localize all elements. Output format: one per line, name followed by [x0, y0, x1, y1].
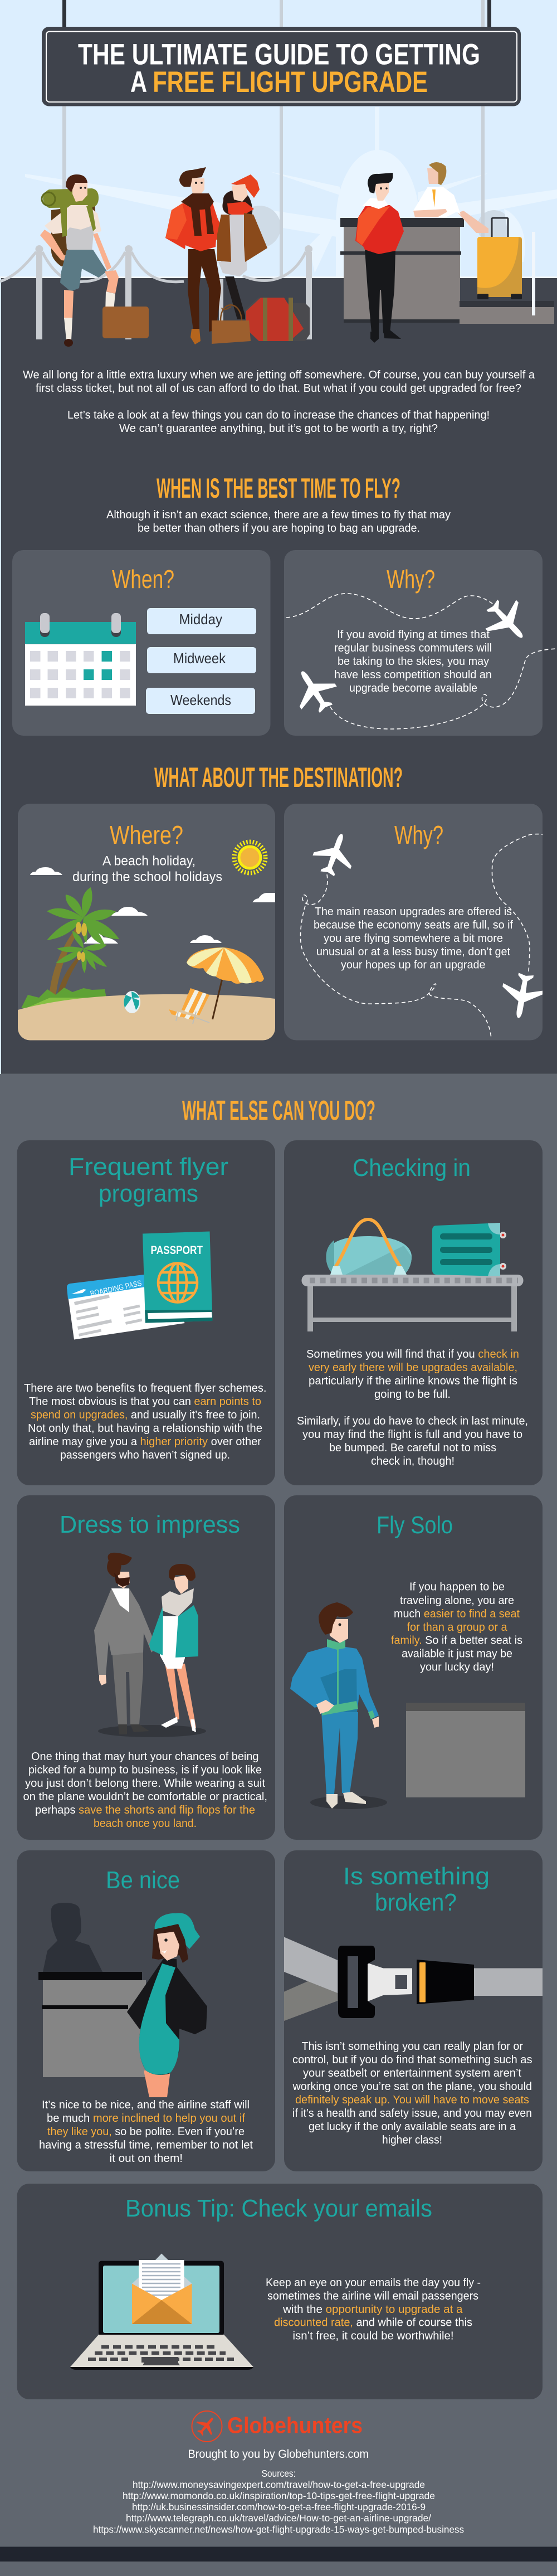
panel: checking in: [284, 1140, 543, 1485]
panel heading: Is something: [343, 1863, 490, 1890]
panel text: This isn’t something you can really plan for or: [302, 2040, 523, 2053]
why text: The main reason upgrades are offered is: [315, 906, 512, 918]
subheading text: [106, 509, 451, 534]
panel heading: Bonus Tip: Check your emails: [125, 2195, 432, 2222]
intro text: We can’t guarantee anything, but it’s got to be worth a try, right?: [119, 422, 438, 435]
option: midday: [147, 608, 256, 634]
panel text: perhaps save the shorts and flip flops for the: [35, 1804, 255, 1816]
panel text: if it’s a health and safety issue, and you may even: [292, 2107, 532, 2120]
panel text: they like you, so be polite. Even if you’re: [47, 2126, 245, 2138]
panel heading: broken?: [375, 1889, 457, 1916]
why text: have less competition should an: [334, 669, 492, 681]
panel text: It’s nice to be nice, and the airline staff will: [42, 2099, 250, 2111]
panel: bonus tip: [17, 2184, 543, 2399]
panel text: [23, 1751, 267, 1830]
why text: regular business commuters will: [334, 642, 492, 654]
dashed flight paths: [300, 834, 556, 1039]
illustration: desk: [406, 1703, 525, 1797]
why text: [334, 629, 492, 694]
sources: http://www.moneysavingexpert.com/travel/how-to-get-a-free-upgrade: [133, 2479, 425, 2490]
panel text: [39, 2099, 253, 2165]
bag: [326, 1236, 412, 1275]
panel text: you just don’t belong there. While wearing a suit: [25, 1777, 265, 1790]
palm trees: [47, 887, 119, 997]
option: midday: Midday: [179, 611, 222, 628]
icon: passport: PASSPORT: [150, 1244, 203, 1257]
icon: plane bottom: [502, 973, 543, 1018]
beach scene: [18, 842, 275, 1041]
panel text: check in, though!: [371, 1455, 455, 1467]
panel text: [391, 1581, 522, 1674]
beach umbrella: [187, 947, 264, 1019]
title text: A FREE FLIGHT UPGRADE: [130, 66, 428, 99]
illustration: luggage: [212, 298, 310, 344]
icon: boarding pass: BOARDING PASS: [89, 1279, 143, 1298]
panel: is something broken: [284, 1850, 543, 2171]
icon: plane bottom left: [284, 660, 344, 720]
panel heading: where: Where?: [110, 820, 183, 849]
where text: during the school holidays: [72, 869, 222, 884]
panel: be nice: [17, 1850, 275, 2171]
why text: If you avoid flying at times that: [337, 629, 490, 641]
panel text: family. So if a better seat is: [391, 1634, 522, 1646]
panel text: your seatbelt or entertainment system aren’t: [303, 2067, 521, 2079]
sources: http://uk.businessinsider.com/how-to-get-a-free-flight-upgrade-2016-9: [132, 2501, 426, 2512]
man with scarf: [165, 167, 223, 344]
rope barriers: [0, 245, 312, 340]
sand: [18, 994, 275, 1041]
logo icon: [192, 2411, 222, 2442]
panel text: particularly if the airline knows the flight is: [309, 1375, 517, 1387]
icon: baggage belt: [302, 1219, 524, 1331]
panel text: higher class!: [382, 2134, 442, 2146]
option: weekends: Weekends: [170, 692, 231, 708]
deck chair: [169, 988, 209, 1024]
panel text: [292, 2040, 532, 2146]
sources: https://www.skyscanner.net/news/how-get-flight-upgrade-15-ways-get-bumped-business: [93, 2524, 464, 2535]
icon: laptop with email: [70, 2254, 253, 2370]
case: [500, 1232, 506, 1238]
panel text: going to be full.: [374, 1388, 451, 1401]
illustration: check-in desk: [340, 218, 554, 324]
panel text: beach once you land.: [94, 1817, 197, 1830]
panel text: control, but if you do find that something such as: [292, 2054, 532, 2066]
why text: because the economy seats are full, so if: [314, 919, 513, 931]
panel text: One thing that may hurt your chances of being: [31, 1751, 258, 1763]
panel text: having a stressful time, remember to not let: [39, 2139, 253, 2151]
intro text: Let’s take a look at a few things you can do to increase the chances of that happening!: [67, 409, 490, 421]
panel heading: Checking in: [353, 1154, 471, 1182]
panel text: get lucky if the only available seats are in a: [309, 2121, 516, 2133]
panel text: [266, 2277, 481, 2342]
bushes: [21, 988, 107, 1009]
panel heading: when: When?: [112, 565, 174, 594]
panel heading: programs: [99, 1180, 198, 1207]
why text: upgrade become available: [349, 682, 477, 694]
panel text: sometimes the airline will email passengers: [267, 2290, 478, 2302]
panel text: available it just may be: [402, 1647, 512, 1660]
subheading text: Although it isn’t an exact science, there are a few times to fly that may: [106, 509, 451, 521]
illustration: solo man: [290, 1602, 387, 1809]
logo wordmark: Globehunters: [227, 2412, 363, 2438]
panel text: picked for a bump to business, is if you look like: [28, 1764, 262, 1776]
panel: where: [18, 804, 275, 1041]
heading: what else: WHAT ELSE CAN YOU DO?: [182, 1095, 375, 1126]
panel text: on the plane wouldn’t be comfortable or practical,: [23, 1791, 267, 1803]
panel text: The most obvious is that you can earn points to: [29, 1396, 261, 1408]
panel heading: [343, 1863, 490, 1916]
panel text: [297, 1348, 528, 1467]
illustration: shadow: [98, 1725, 206, 1737]
icon: seatbelt: [284, 1937, 543, 2021]
sources: [93, 2468, 464, 2535]
panel: frequent flyer programs: [17, 1140, 275, 1485]
icon: passport: [143, 1232, 213, 1323]
panel text: Sometimes you will find that if you check in: [306, 1348, 519, 1360]
illustration: silhouette clerk: [43, 1903, 102, 1972]
why text: your hopes up for an upgrade: [341, 959, 486, 971]
dashed flight paths: [286, 594, 557, 729]
panel: fly solo: [284, 1495, 543, 1840]
why text: unusual or at a less busy time, don’t get: [316, 946, 510, 958]
airport window scene: [0, 0, 557, 1074]
illustration: yellow suitcase: [477, 218, 522, 299]
footer band: [0, 2547, 557, 2562]
panel text: traveling alone, you are: [400, 1595, 514, 1607]
why text: [314, 906, 513, 971]
background: lower grey section: [0, 1073, 557, 2576]
panel: when: [12, 550, 271, 736]
illustration: receptionist: [413, 162, 488, 233]
panel text: [24, 1382, 266, 1461]
intro text: first class ticket, but not all of us can afford to do that. But what if you could get upgraded for free?: [36, 382, 521, 395]
panel: dress to impress: [17, 1495, 275, 1840]
illustration: woman in teal: [149, 1564, 198, 1732]
background: upper dark section: [0, 0, 557, 1074]
why text: be taking to the skies, you may: [338, 655, 489, 668]
panel text: spend on upgrades, and usually it’s free to join.: [31, 1409, 260, 1421]
panel text: much easier to find a seat: [394, 1608, 520, 1620]
panel text: you may find the flight is full and you have to: [302, 1428, 522, 1441]
intro text: [23, 369, 535, 435]
sources: http://www.momondo.co.uk/inspiration/top-10-tips-get-free-flight-upgrade: [123, 2490, 435, 2501]
where text: [72, 854, 222, 884]
logo: globehunters: [192, 2411, 363, 2442]
illustration: suited man: [94, 1553, 157, 1734]
panel heading: why: Why?: [387, 565, 435, 594]
panel text: very early there will be upgrades available,: [309, 1362, 517, 1374]
clouds: [30, 867, 275, 944]
illustration: couple: [165, 167, 267, 344]
icon: plane top right: [477, 591, 538, 652]
illustration: backpacker: [40, 174, 149, 347]
credit line: Brought to you by Globehunters.com: [188, 2448, 369, 2461]
panel text: If you happen to be: [409, 1581, 505, 1593]
panel heading: why: Why?: [394, 820, 443, 849]
why text: you are flying somewhere a bit more: [324, 932, 503, 945]
beach ball: [124, 991, 140, 1013]
illustration: hoodie traveller: [355, 173, 404, 343]
panel heading: [69, 1153, 228, 1207]
panel text: There are two benefits to frequent flyer schemes.: [24, 1382, 266, 1394]
panel text: it out on them!: [109, 2152, 183, 2165]
panel text: Similarly, if you do have to check in last minute,: [297, 1415, 528, 1427]
panel heading: Be nice: [106, 1867, 180, 1894]
panel heading: Fly Solo: [377, 1511, 453, 1539]
panel heading: Dress to impress: [60, 1511, 240, 1538]
panel text: with the opportunity to upgrade at a: [282, 2303, 463, 2316]
panel text: be bumped. Be careful not to miss: [329, 1442, 496, 1454]
panel: why destination: [284, 804, 543, 1040]
option: midweek: [147, 647, 256, 673]
subheading text: be better than others if you are hoping to bag an upgrade.: [138, 522, 420, 534]
panel text: isn’t free, it could be worthwhile!: [293, 2330, 453, 2342]
panel text: definitely speak up. You will have to move seats: [295, 2094, 529, 2106]
illustration: woman in black jacket: [127, 1913, 207, 2097]
sources: Sources:: [262, 2468, 296, 2479]
panel: why fly then: [284, 550, 543, 736]
where text: A beach holiday,: [102, 854, 196, 868]
option: weekends: [146, 688, 255, 714]
panel text: working once you’re sat on the plane, you should: [292, 2081, 532, 2093]
intro text: We all long for a little extra luxury when we are jetting off somewhere. Of course, you can buy yourself a: [23, 369, 535, 381]
illustration: counter: [38, 1972, 146, 2077]
sources: http://www.telegraph.co.uk/travel/advice/How-to-get-an-airline-upgrade/: [126, 2512, 431, 2524]
panel text: airline may give you a higher priority over other: [29, 1436, 261, 1448]
panel text: be much more inclined to help you out if: [47, 2112, 245, 2125]
icon: plane top: [309, 827, 361, 881]
panel text: Not only that, but having a relationship with the: [28, 1422, 262, 1435]
icon: sun: [234, 842, 265, 873]
icon: boarding pass: [67, 1275, 185, 1340]
icon: calendar: [25, 613, 136, 706]
panel text: Keep an eye on your emails the day you fly -: [266, 2277, 481, 2289]
panel text: for than a group or a: [407, 1621, 507, 1634]
panel text: your lucky day!: [420, 1661, 494, 1674]
title sign: [42, 0, 521, 106]
panel heading: Frequent flyer: [69, 1153, 228, 1180]
woman with red hat: [217, 174, 267, 319]
option: midweek: Midweek: [173, 650, 226, 667]
panel text: passengers who haven’t signed up.: [60, 1449, 230, 1461]
title text: [78, 38, 480, 99]
panel text: discounted rate, and while of course this: [274, 2317, 472, 2329]
